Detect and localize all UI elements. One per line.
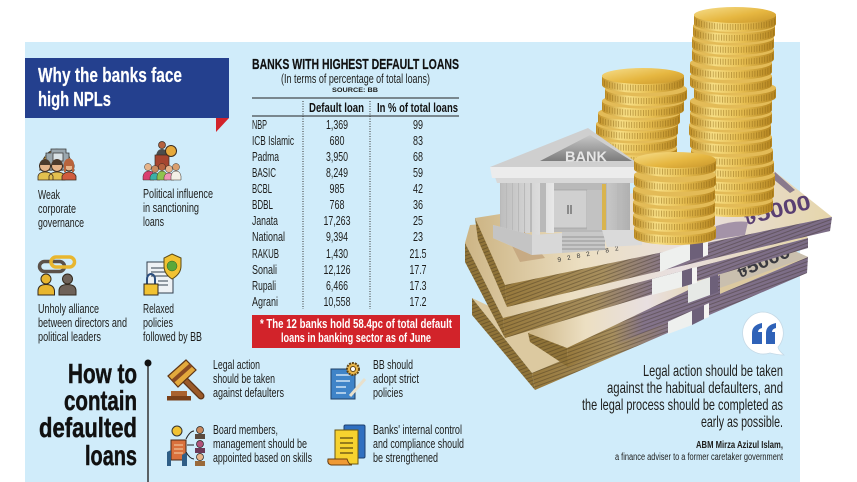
quote block bbox=[582, 312, 784, 463]
coin stack: front bbox=[633, 152, 716, 245]
table rows: Agrani bbox=[252, 294, 278, 309]
text: Board members, bbox=[213, 422, 278, 437]
icon: clipboard, clock, arrows and candidates bbox=[167, 426, 205, 466]
table subtitle: (In terms of percentage of total loans) bbox=[281, 71, 430, 86]
icon: speaker at podium with audience bbox=[143, 142, 181, 180]
text: Political influence bbox=[143, 186, 213, 201]
table rows: ICB Islamic bbox=[252, 133, 294, 148]
callout: 12 banks share: loans in banking sector as of June bbox=[281, 330, 431, 345]
measure: BB policies bbox=[331, 357, 419, 400]
bank building: BANK bbox=[565, 150, 608, 166]
measure: legal action bbox=[167, 357, 284, 400]
text: Weak bbox=[38, 187, 60, 202]
text: between directors and bbox=[38, 315, 127, 330]
heading: how to contain defaulted loans: defaulted bbox=[39, 412, 137, 443]
table rows: 36 bbox=[413, 197, 423, 212]
text: corporate bbox=[38, 201, 76, 216]
table rows bbox=[252, 117, 426, 309]
icon: speech bubble with quotation mark bbox=[743, 312, 784, 355]
table rows: 17.3 bbox=[410, 278, 426, 293]
text: against defaulters bbox=[213, 385, 284, 400]
heading: how to contain defaulted loans: How to bbox=[68, 358, 137, 389]
text bbox=[38, 301, 127, 344]
table rows: 768 bbox=[330, 197, 344, 212]
timeline rule with dot bbox=[144, 360, 152, 482]
text: BB should bbox=[373, 357, 413, 372]
table rows: 9,394 bbox=[326, 229, 348, 244]
cause: weak corporate governance bbox=[38, 149, 84, 230]
cause: unholy alliance bbox=[38, 257, 127, 344]
illustration: banknotes, coins and bank bbox=[465, 7, 832, 390]
text: political leaders bbox=[38, 329, 101, 344]
table rows: 985 bbox=[330, 181, 344, 196]
table: banks with highest default loans bbox=[252, 56, 460, 348]
table rows: NBP bbox=[252, 117, 267, 132]
table rows: 1,369 bbox=[326, 117, 348, 132]
measure: board appointments bbox=[167, 422, 312, 466]
bank building bbox=[490, 128, 643, 255]
note serial number: 9282782 bbox=[557, 245, 620, 264]
coin stack: tall bbox=[689, 7, 776, 217]
text: Relaxed bbox=[143, 301, 174, 316]
table rows: Janata bbox=[252, 213, 279, 228]
quote text: against the habitual defaulters, and bbox=[607, 380, 783, 397]
table rows: 6,466 bbox=[326, 278, 348, 293]
text bbox=[143, 186, 213, 229]
attribution: ABM Mirza Azizul Islam, bbox=[696, 440, 783, 451]
text bbox=[373, 357, 419, 400]
table rows: BDBL bbox=[252, 197, 273, 212]
text: loans bbox=[143, 214, 164, 229]
text bbox=[373, 422, 464, 465]
text: policies bbox=[373, 385, 403, 400]
note value: lower bundle: ৳5000 bbox=[734, 241, 793, 282]
attribution: a finance adviser to a former caretaker government bbox=[615, 452, 783, 463]
callout: 12 banks share bbox=[252, 315, 460, 348]
heading: why the banks face high NPLs bbox=[25, 58, 229, 132]
table rows: RAKUB bbox=[252, 246, 279, 261]
table rows: National bbox=[252, 229, 285, 244]
banknote bundle: third bbox=[528, 262, 720, 367]
table rows: BASIC bbox=[252, 165, 276, 180]
icon: checklist with gear and pen bbox=[331, 363, 365, 399]
table rows: 25 bbox=[413, 213, 423, 228]
table rows: 12,126 bbox=[324, 262, 350, 277]
text: adopt strict bbox=[373, 371, 419, 386]
table rows: Padma bbox=[252, 149, 279, 164]
text: followed by BB bbox=[143, 329, 202, 344]
column headers bbox=[309, 100, 458, 115]
coin stack: middle bbox=[595, 68, 687, 165]
quote text: early as possible. bbox=[701, 414, 783, 431]
table rows: Sonali bbox=[252, 262, 277, 277]
heading: how to contain defaulted loans: contain bbox=[64, 385, 137, 416]
icon: document, padlock and shield bbox=[144, 254, 181, 295]
icon: scrolls bbox=[328, 425, 365, 465]
table rows: 17,263 bbox=[324, 213, 350, 228]
banknote bundle: top bbox=[475, 170, 832, 307]
icon: company building and people bbox=[38, 149, 76, 180]
table rows: Rupali bbox=[252, 278, 276, 293]
table rows: 17.2 bbox=[410, 294, 426, 309]
heading: how to contain defaulted loans bbox=[39, 358, 137, 471]
text: policies bbox=[143, 315, 173, 330]
table rows: 680 bbox=[330, 133, 344, 148]
heading: why the banks face high NPLs: Why the banks face bbox=[38, 65, 182, 87]
icon: chain and two people bbox=[38, 257, 76, 295]
table rows: 1,430 bbox=[326, 246, 348, 261]
table title: BANKS WITH HIGHEST DEFAULT LOANS bbox=[252, 56, 459, 73]
column headers: Default loan bbox=[309, 100, 364, 115]
heading: why the banks face high NPLs: high NPLs bbox=[38, 89, 111, 111]
heading: how to contain defaulted loans: loans bbox=[85, 440, 137, 471]
text: be strengthened bbox=[373, 450, 438, 465]
cause: relaxed policies bbox=[143, 254, 202, 344]
table rows: 23 bbox=[413, 229, 423, 244]
table rows: 68 bbox=[413, 149, 423, 164]
banknote bundle: bottom bbox=[472, 240, 808, 390]
table rows: 17.7 bbox=[410, 262, 426, 277]
table rows: 3,950 bbox=[326, 149, 348, 164]
table rows: 99 bbox=[413, 117, 423, 132]
column headers: In % of total loans bbox=[377, 100, 458, 115]
banknote bundle: second bbox=[465, 200, 808, 338]
text bbox=[213, 422, 312, 465]
table rows: 42 bbox=[413, 181, 423, 196]
table rows: 59 bbox=[413, 165, 423, 180]
text: Unholy alliance bbox=[38, 301, 99, 316]
text: should be taken bbox=[213, 371, 275, 386]
table rows: 21.5 bbox=[410, 246, 426, 261]
table rows: 10,558 bbox=[324, 294, 350, 309]
quote text: Legal action should be taken bbox=[643, 363, 783, 380]
table rows: BCBL bbox=[252, 181, 272, 196]
callout: 12 banks share: * The 12 banks hold 58.4pc of total default bbox=[260, 316, 452, 331]
icon: gavel bbox=[167, 360, 201, 400]
text bbox=[143, 301, 202, 344]
text: Legal action bbox=[213, 357, 260, 372]
quote text bbox=[582, 363, 783, 431]
text: Banks' internal control bbox=[373, 422, 462, 437]
text bbox=[213, 357, 284, 400]
source: SOURCE: BB bbox=[332, 88, 379, 94]
attribution bbox=[615, 440, 783, 463]
text: appointed based on skills bbox=[213, 450, 312, 465]
note value: top bundle: ৳5000 bbox=[742, 191, 813, 230]
table rows: 83 bbox=[413, 133, 423, 148]
text: and compliance should bbox=[373, 436, 464, 451]
table rows: 8,249 bbox=[326, 165, 348, 180]
text: in sanctioning bbox=[143, 200, 199, 215]
text: governance bbox=[38, 215, 84, 230]
cause: political influence bbox=[143, 142, 213, 229]
measure: internal control bbox=[328, 422, 464, 465]
text: management should be bbox=[213, 436, 307, 451]
text bbox=[38, 187, 84, 230]
